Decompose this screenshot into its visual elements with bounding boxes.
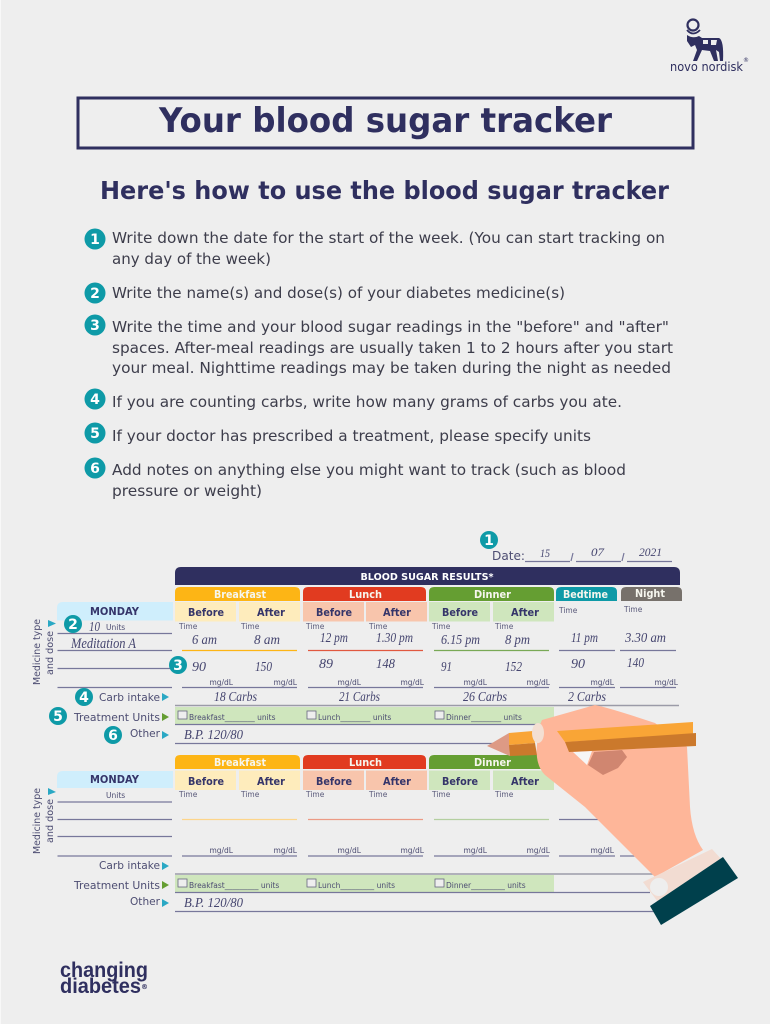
meal headers <box>175 755 554 769</box>
meal headers: Breakfast <box>214 589 266 601</box>
meal headers: Lunch <box>349 589 382 601</box>
meal headers: Breakfast <box>214 757 266 769</box>
logo: novo nordisk: ® <box>743 57 749 64</box>
logo: changing diabetes: diabetes <box>60 975 141 998</box>
before / after cells: Before <box>188 776 224 788</box>
carb intake row <box>75 688 679 706</box>
results banner: BLOOD SUGAR RESULTS* <box>360 572 494 583</box>
date field: 15 <box>540 546 550 560</box>
time and reading rows: 6 am <box>192 633 217 648</box>
carb intake row: 4 <box>79 690 89 706</box>
gap between fingers <box>573 751 592 765</box>
carb intake row: 2 Carbs <box>568 690 606 705</box>
time and reading rows: mg/dL <box>273 846 298 855</box>
treatment units row: Treatment Units <box>73 712 160 724</box>
medicine column: 2 <box>68 617 78 633</box>
tracker day 2: blank <box>32 755 670 912</box>
step 1: 1 <box>90 232 100 248</box>
step 3: Write the time and your blood sugar readings in the "before" and "after" <box>112 318 669 336</box>
step 1: any day of the week) <box>112 250 271 268</box>
time and reading rows: 148 <box>376 657 395 672</box>
time and reading rows: 11 pm <box>571 631 598 646</box>
time and reading rows: 90 <box>192 660 206 675</box>
treatment units row <box>49 707 554 725</box>
time and reading rows: 91 <box>441 660 452 675</box>
other row: B.P. 120/80 <box>184 896 243 911</box>
time and reading rows: mg/dL <box>590 846 615 855</box>
instructions list <box>84 228 673 500</box>
tracker day 1: filled example <box>32 587 682 744</box>
cuff button <box>650 878 668 896</box>
medicine column: Meditation A <box>70 636 137 652</box>
time and reading rows <box>178 790 640 856</box>
pencil <box>487 722 696 756</box>
day label <box>57 771 173 788</box>
step 6: 6 <box>90 461 100 477</box>
carb intake row: Carb intake <box>99 692 160 704</box>
step 6 <box>84 458 626 500</box>
before / after cells: After <box>383 607 412 619</box>
other row <box>104 726 500 744</box>
before / after cells: After <box>511 776 540 788</box>
before / after cells: Before <box>316 607 352 619</box>
illustration: hand holding pencil <box>487 705 738 925</box>
title box: Your blood sugar tracker <box>158 101 612 141</box>
date field: 2021 <box>639 545 662 559</box>
logo: changing diabetes: ® <box>141 983 148 991</box>
other row: Other <box>130 896 161 908</box>
before / after cells: Before <box>442 776 478 788</box>
logo: novo nordisk <box>670 20 749 74</box>
step 4: 4 <box>90 392 100 408</box>
time and reading rows: 8 pm <box>505 633 530 648</box>
carb intake row <box>99 860 660 874</box>
treatment units row: Lunch_________ units <box>318 881 395 890</box>
treatment units row: Lunch________ units <box>318 713 391 722</box>
carb intake row: 21 Carbs <box>339 690 380 705</box>
palm shadow <box>588 750 627 775</box>
time and reading rows: Time <box>368 622 388 631</box>
medicine column: Units <box>106 791 125 800</box>
day label: MONDAY <box>90 606 139 618</box>
treatment units row: 5 <box>53 709 63 725</box>
time and reading rows: mg/dL <box>337 846 362 855</box>
treatment units row: Dinner_________ units <box>446 881 526 890</box>
time and reading rows: Time <box>368 790 388 799</box>
fingertip <box>532 723 544 743</box>
time and reading rows: mg/dL <box>209 846 234 855</box>
time and reading rows: mg/dL <box>526 846 551 855</box>
treatment units row: Treatment Units <box>73 880 160 892</box>
date field: Date: <box>492 548 525 563</box>
time and reading rows: mg/dL <box>400 846 425 855</box>
step 5: If your doctor has prescribed a treatment, please specify units <box>112 427 591 445</box>
meal headers: Bedtime <box>563 589 608 601</box>
hand <box>537 705 703 877</box>
time and reading rows: 3 <box>173 658 183 674</box>
time and reading rows: mg/dL <box>209 678 234 687</box>
treatment units row <box>73 875 650 892</box>
time and reading rows: Time <box>494 622 514 631</box>
time and reading rows: mg/dL <box>273 678 298 687</box>
medicine column: and dose <box>45 631 56 675</box>
time and reading rows: Time <box>558 606 578 615</box>
time and reading rows: 150 <box>255 660 272 675</box>
step 1: Write down the date for the start of the week. (You can start tracking on <box>112 229 665 247</box>
time and reading rows: 1.30 pm <box>376 631 413 646</box>
step 6: pressure or weight) <box>112 482 262 500</box>
step 3 <box>84 314 673 377</box>
step 1 <box>84 228 665 268</box>
before / after cells: After <box>511 607 540 619</box>
before / after cells: After <box>257 776 286 788</box>
carb intake row: Carb intake <box>99 860 160 872</box>
time and reading rows: Time <box>431 622 451 631</box>
logo: changing diabetes <box>60 959 148 998</box>
step 2: 2 <box>90 286 100 302</box>
treatment units row: Breakfast________ units <box>189 713 276 722</box>
medicine column: Units <box>106 623 125 632</box>
step 3: spaces. After-meal readings are usually taken 1 to 2 hours after you start <box>112 339 673 357</box>
step 2: Write the name(s) and dose(s) of your diabetes medicine(s) <box>112 284 565 302</box>
medicine column: Medicine type <box>32 788 43 854</box>
step 5: 5 <box>90 426 100 442</box>
meal headers <box>175 587 682 601</box>
other row: Other <box>130 728 161 740</box>
time and reading rows: 3.30 am <box>624 631 666 646</box>
time and reading rows <box>169 605 679 688</box>
meal headers: Dinner <box>474 589 512 601</box>
before / after cells: Before <box>188 607 224 619</box>
time and reading rows: Time <box>178 622 198 631</box>
other row: 6 <box>108 728 118 744</box>
jacket sleeve <box>650 857 738 925</box>
step 4: If you are counting carbs, write how many grams of carbs you ate. <box>112 393 622 411</box>
date field: 1 <box>484 533 494 549</box>
treatment units row: Dinner________ units <box>446 713 522 722</box>
time and reading rows: mg/dL <box>400 678 425 687</box>
time and reading rows: 90 <box>571 657 585 672</box>
medicine column <box>32 615 172 688</box>
time and reading rows: Time <box>305 622 325 631</box>
carb intake row: 26 Carbs <box>463 690 507 705</box>
time and reading rows: mg/dL <box>463 678 488 687</box>
time and reading rows: mg/dL <box>654 678 679 687</box>
day label <box>57 602 173 620</box>
time and reading rows: mg/dL <box>526 678 551 687</box>
treatment units row: Breakfast_________ units <box>189 881 279 890</box>
meal headers: Night <box>635 588 665 600</box>
shirt cuff <box>643 849 721 902</box>
before / after cells <box>175 602 554 622</box>
step 3: your meal. Nighttime readings may be taken during the night as needed <box>112 359 671 377</box>
time and reading rows: 140 <box>627 656 644 671</box>
results banner <box>175 567 680 585</box>
before / after cells: After <box>383 776 412 788</box>
meal headers: Lunch <box>349 757 382 769</box>
step 3: 3 <box>90 318 100 334</box>
other row: B.P. 120/80 <box>184 728 243 743</box>
time and reading rows: Time <box>305 790 325 799</box>
time and reading rows: 89 <box>319 657 333 672</box>
time and reading rows: Time <box>240 622 260 631</box>
meal headers: Dinner <box>474 757 512 769</box>
medicine column: Medicine type <box>32 619 43 685</box>
time and reading rows: Time <box>240 790 260 799</box>
medicine column: and dose <box>45 799 56 843</box>
title box <box>78 98 693 148</box>
logo: changing diabetes: changing <box>60 959 148 982</box>
time and reading rows: mg/dL <box>463 846 488 855</box>
step 6: Add notes on anything else you might want to track (such as blood <box>112 461 626 479</box>
time and reading rows: mg/dL <box>337 678 362 687</box>
day label: MONDAY <box>90 774 139 786</box>
time and reading rows: Time <box>431 790 451 799</box>
time and reading rows: 6.15 pm <box>441 633 480 648</box>
medicine column <box>32 788 172 856</box>
heading: Here's how to use the blood sugar tracker <box>100 176 670 205</box>
carb intake row: 18 Carbs <box>214 690 257 705</box>
medicine column: 10 <box>89 620 100 635</box>
time and reading rows: Time <box>494 790 514 799</box>
time and reading rows: 12 pm <box>320 631 348 646</box>
before / after cells: Before <box>442 607 478 619</box>
logo: novo nordisk: novo nordisk <box>670 60 743 74</box>
time and reading rows: Time <box>178 790 198 799</box>
other row <box>130 896 670 912</box>
time and reading rows: mg/dL <box>590 678 615 687</box>
before / after cells: After <box>257 607 286 619</box>
time and reading rows: 152 <box>505 660 522 675</box>
time and reading rows: Time <box>623 605 643 614</box>
before / after cells: Before <box>316 776 352 788</box>
time and reading rows: 8 am <box>254 633 280 648</box>
date field: 07 <box>591 545 605 559</box>
before / after cells <box>175 770 554 790</box>
date field <box>480 531 672 563</box>
